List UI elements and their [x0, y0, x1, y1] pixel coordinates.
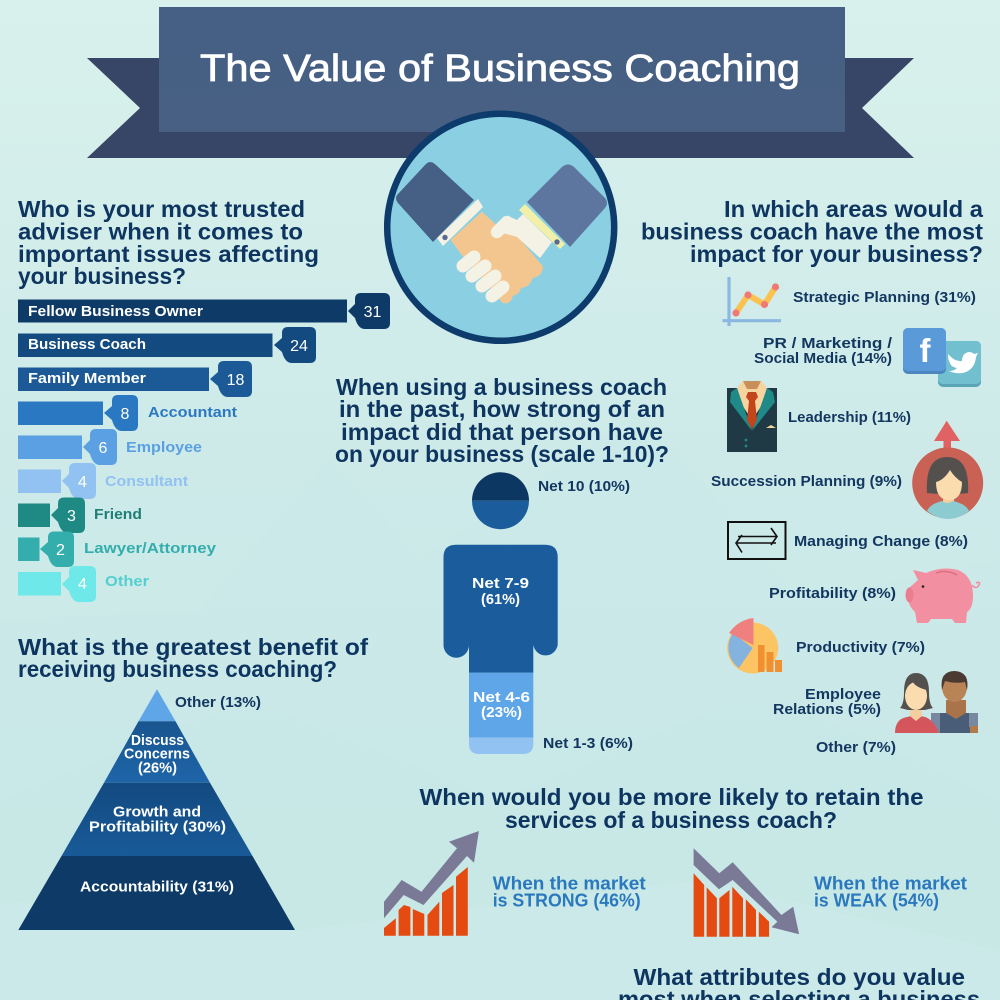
label: market weak	[814, 874, 967, 910]
heading: market conditions: When would you be more likely to retain the	[420, 784, 924, 810]
person chart: Net 1-3 (6%)	[543, 735, 633, 752]
bar: Friend 3: Friend	[94, 506, 142, 523]
panel: impact scale	[335, 374, 669, 754]
heading: market conditions	[420, 784, 924, 833]
bar: Employee 6	[18, 429, 202, 465]
label: managing change: Managing Change (8%)	[794, 533, 968, 550]
bar: Employee 6: Employee	[126, 439, 202, 456]
label: succession planning: Succession Planning (9%)	[711, 473, 902, 490]
heading: impact scale	[335, 374, 669, 467]
bar: Accountant 8: Accountant	[148, 404, 237, 421]
heading: greatest benefit: What is the greatest benefit of	[18, 634, 368, 660]
icon: falling chart	[694, 848, 799, 937]
icon: change arrows box	[728, 522, 786, 559]
label: market strong: is STRONG (46%)	[493, 890, 641, 910]
bar: Employee 6: 6	[99, 440, 108, 457]
person chart: Net 10 (10%)	[538, 478, 630, 495]
bar: Other 4	[18, 566, 149, 602]
pyramid chart: Growth and	[113, 804, 201, 820]
pyramid chart: Discuss	[131, 732, 184, 749]
title ribbon	[87, 7, 914, 158]
bar: Fellow Business Owner 31: 31	[364, 304, 382, 321]
label: market weak: is WEAK (54%)	[814, 890, 939, 910]
icon: line chart	[722, 277, 781, 326]
pyramid chart: Concerns	[124, 746, 190, 762]
heading: impact scale: impact did that person have	[341, 419, 663, 445]
heading: trusted adviser: adviser when it comes to	[18, 218, 303, 244]
person chart: Net 4-6	[473, 689, 530, 706]
bar: Business Coach 24: Business Coach	[28, 336, 146, 353]
heading: impact scale: in the past, how strong of an	[339, 396, 665, 422]
bar: Friend 3	[18, 498, 142, 533]
label: employee relations: Employee	[805, 686, 881, 703]
pyramid chart: (26%)	[138, 760, 177, 776]
heading: impact scale: on your business (scale 1-10)?	[335, 441, 669, 467]
panel: impact areas	[641, 196, 984, 756]
person chart: Net 7-9	[472, 575, 529, 592]
icon: two employees	[895, 671, 978, 733]
label: market strong	[493, 874, 646, 910]
bar: Lawyer/Attorney 2	[18, 532, 217, 567]
label: other: Other (7%)	[816, 739, 896, 756]
heading: impact areas: impact for your business?	[690, 241, 983, 267]
label: market strong: When the market	[493, 874, 646, 894]
bar: Lawyer/Attorney 2: Lawyer/Attorney	[84, 540, 217, 557]
bar: Family Member 18	[18, 361, 252, 397]
label: market weak: When the market	[814, 874, 967, 894]
bar: Lawyer/Attorney 2: 2	[56, 542, 65, 559]
label: PR marketing social media: PR / Marketing /	[763, 335, 893, 352]
heading: impact areas	[641, 196, 984, 267]
bar: Accountant 8: 8	[121, 406, 130, 423]
heading: trusted adviser: your business?	[18, 263, 186, 289]
icon: suit	[727, 381, 777, 452]
panel: trusted adviser	[18, 196, 390, 602]
heading: trusted adviser: important issues affecting	[18, 241, 319, 267]
pyramid chart: Profitability (30%)	[89, 818, 226, 836]
person chart: (23%)	[481, 704, 522, 721]
heading: impact areas: business coach have the most	[641, 218, 983, 244]
label: profitability: Profitability (8%)	[769, 585, 896, 602]
bar: Family Member 18: Family Member	[28, 370, 146, 387]
bar: Consultant 4	[18, 463, 188, 499]
bar: Fellow Business Owner 31	[18, 293, 390, 329]
heading: trusted adviser	[18, 196, 319, 289]
icon: social media	[903, 328, 981, 387]
icon: succession person with arrow	[912, 421, 983, 519]
pyramid chart: Other (13%)	[175, 694, 261, 711]
person chart: (61%)	[481, 591, 520, 608]
ribbon tails	[87, 58, 914, 158]
heading: trusted adviser: Who is your most trusted	[18, 196, 305, 222]
bar: Fellow Business Owner 31: Fellow Business Owner	[28, 303, 203, 320]
label: PR marketing social media	[754, 335, 893, 367]
bar: Accountant 8	[18, 395, 237, 431]
person chart	[444, 472, 633, 754]
pyramid chart	[18, 689, 295, 930]
icon: handshake in circle	[387, 114, 614, 341]
label: strategic planning: Strategic Planning (31%)	[793, 289, 976, 306]
panel: market conditions	[384, 784, 967, 937]
heading: attributes	[618, 964, 980, 1000]
heading: greatest benefit: receiving business coaching?	[18, 656, 337, 682]
label: leadership: Leadership (11%)	[788, 409, 911, 426]
bar: Other 4: 4	[78, 576, 87, 593]
heading: market conditions: services of a business coach?	[505, 807, 837, 833]
label: productivity: Productivity (7%)	[796, 639, 925, 656]
bar: Family Member 18: 18	[227, 372, 244, 389]
bar: Other 4: Other	[105, 573, 149, 590]
label: employee relations: Relations (5%)	[773, 701, 881, 718]
heading: impact areas: In which areas would a	[724, 196, 984, 222]
icon: piggy bank	[906, 569, 980, 623]
heading: impact scale: When using a business coach	[336, 374, 667, 400]
heading: attributes: What attributes do you value	[634, 964, 965, 990]
icon: rising chart	[384, 831, 479, 936]
icon: social media: f	[920, 332, 932, 369]
ribbon panel	[159, 7, 845, 132]
heading: greatest benefit	[18, 634, 368, 682]
bar: Business Coach 24: 24	[290, 338, 308, 355]
icon: pie and bars	[727, 618, 782, 674]
panel: greatest benefit	[18, 634, 368, 930]
label: PR marketing social media: Social Media (14%)	[754, 350, 892, 367]
bar: Business Coach 24	[18, 327, 316, 363]
bar: Friend 3: 3	[67, 508, 76, 525]
title: The Value of Business Coaching	[200, 48, 800, 90]
pyramid chart: Accountability (31%)	[80, 878, 234, 896]
label: employee relations	[773, 686, 881, 718]
bar: Consultant 4: 4	[78, 474, 87, 491]
bar: Consultant 4: Consultant	[105, 473, 188, 490]
